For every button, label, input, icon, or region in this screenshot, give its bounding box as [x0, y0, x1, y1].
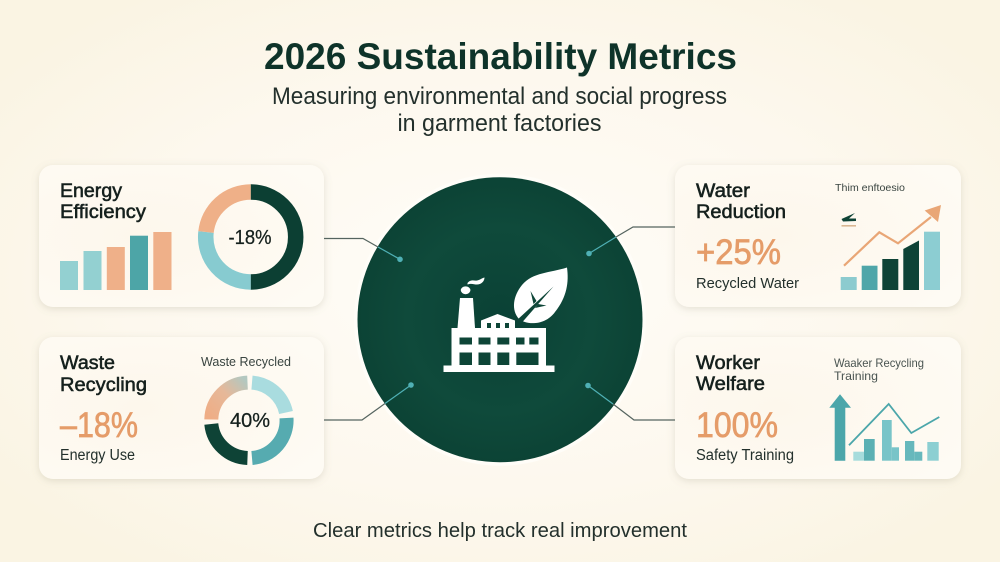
donut chart: waste recycled [201, 355, 291, 458]
title: 2026 Sustainability Metrics [264, 36, 737, 77]
central disc with factory and leaf [354, 174, 646, 466]
heading: water reduction: Water [696, 180, 751, 202]
subtitle: Measuring environmental and social progress [272, 83, 727, 110]
heading: waste recycling: Recycling [60, 374, 147, 396]
value: -18%: -18% [228, 227, 272, 249]
stat: -18% energy use: Energy Use [60, 447, 135, 464]
stat: 100% safety training [696, 406, 794, 464]
chart label: Waaker Recycling [834, 356, 924, 370]
chart label [834, 356, 924, 383]
icon: small arrow glyph [842, 213, 856, 227]
stat: -18% energy use: –18% [60, 406, 138, 445]
heading: energy efficiency: Energy [60, 180, 122, 202]
bar chart: energy [60, 232, 172, 290]
chart label: Training [834, 369, 878, 383]
value: 40%: 40% [230, 410, 270, 432]
bar and trend chart: worker [829, 394, 939, 461]
heading: energy efficiency: Efficiency [60, 201, 146, 223]
stat: 100% safety training: 100% [696, 406, 778, 445]
bar and trend chart: water [841, 205, 941, 290]
heading: energy efficiency [60, 180, 146, 223]
icon: factory [444, 278, 554, 372]
connector: waste recycling [324, 382, 414, 420]
heading: worker welfare: Worker [696, 352, 761, 374]
stat: +25% recycled water: Recycled Water [696, 275, 799, 292]
connector: water reduction [586, 227, 675, 256]
stat: 100% safety training: Safety Training [696, 447, 794, 464]
chart label: Thim enftoesio [835, 182, 905, 194]
panel: energy efficiency [39, 165, 324, 307]
panel: waste recycling [39, 337, 324, 479]
arrow: trend [844, 205, 941, 266]
heading: water reduction: Reduction [696, 201, 786, 223]
stat: -18% energy use [60, 406, 138, 464]
footer caption: Clear metrics help track real improvement [313, 520, 687, 542]
connector: energy efficiency [324, 238, 403, 262]
connector: worker welfare [585, 383, 675, 420]
arrow: upward [829, 394, 851, 461]
heading: worker welfare: Welfare [696, 373, 765, 395]
stat: +25% recycled water [696, 233, 799, 292]
icon: leaf [514, 268, 568, 323]
donut chart: waste recycled: Waste Recycled [201, 355, 291, 369]
heading: worker welfare [696, 352, 765, 395]
subtitle: in garment factories [398, 110, 602, 137]
panel: worker welfare [675, 337, 961, 479]
heading: water reduction [696, 180, 786, 223]
donut chart: energy [206, 192, 296, 282]
heading: waste recycling [60, 352, 147, 396]
subtitle [272, 83, 727, 137]
heading: waste recycling: Waste [60, 352, 115, 374]
panel: water reduction [675, 165, 961, 307]
stat: +25% recycled water: +25% [696, 233, 781, 272]
